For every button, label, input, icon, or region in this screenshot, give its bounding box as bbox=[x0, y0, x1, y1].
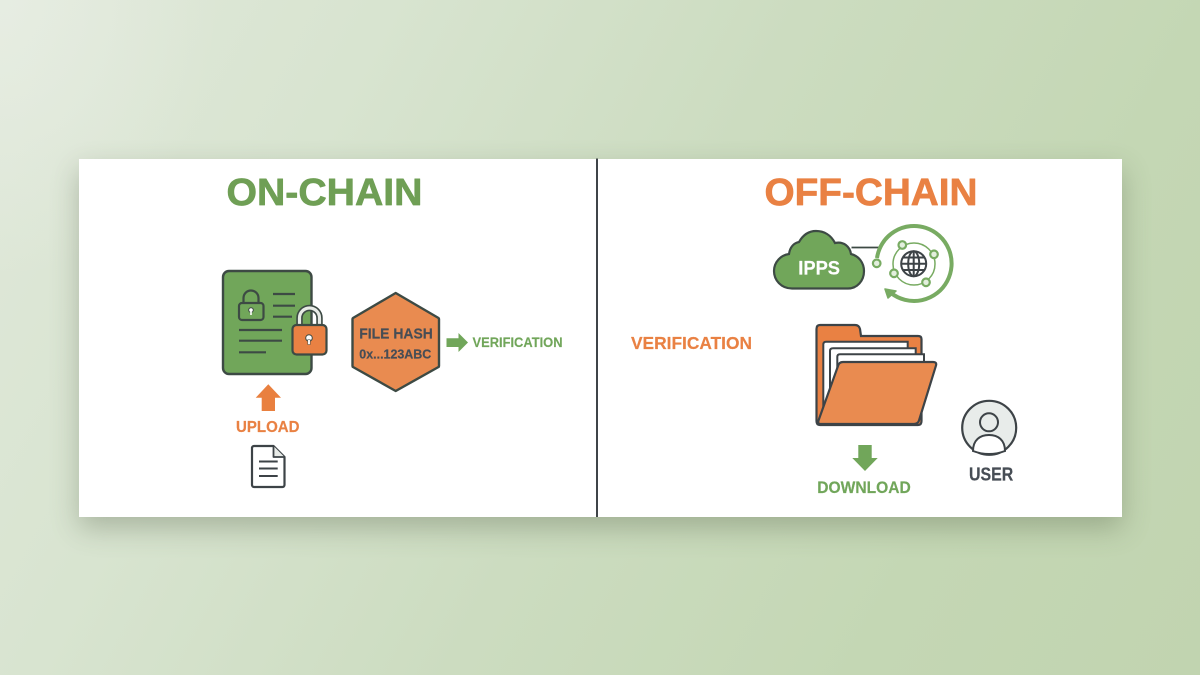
icon: source file bbox=[252, 446, 284, 487]
icon: file hash hexagon: FILE HASH bbox=[359, 326, 433, 342]
icon: locked document bbox=[223, 271, 326, 374]
icon: open folder bbox=[816, 325, 936, 425]
label: download: DOWNLOAD bbox=[817, 478, 911, 497]
label: upload: UPLOAD bbox=[236, 419, 300, 436]
icon: user avatar bbox=[962, 401, 1016, 455]
arrow: to verification bbox=[446, 333, 468, 352]
icon: file hash hexagon bbox=[352, 293, 439, 391]
heading: off-chain: OFF-CHAIN bbox=[764, 172, 978, 214]
icon: connector line bbox=[852, 246, 880, 248]
arrow: upload bbox=[256, 384, 281, 411]
heading: on-chain: ON-CHAIN bbox=[226, 172, 422, 214]
label: verification (off-chain): VERIFICATION bbox=[631, 333, 752, 353]
label: user: USER bbox=[969, 464, 1013, 484]
icon: IPPS cloud bbox=[774, 231, 864, 288]
icon: file hash hexagon: 0x...123ABC bbox=[359, 348, 431, 362]
arrow: download bbox=[852, 445, 878, 471]
label: verification (on-chain): VERIFICATION bbox=[472, 335, 562, 350]
panel: white comparison card bbox=[78, 158, 1122, 517]
icon: IPFS network globe bbox=[873, 226, 952, 301]
icon: IPPS cloud: IPPS bbox=[798, 257, 840, 279]
